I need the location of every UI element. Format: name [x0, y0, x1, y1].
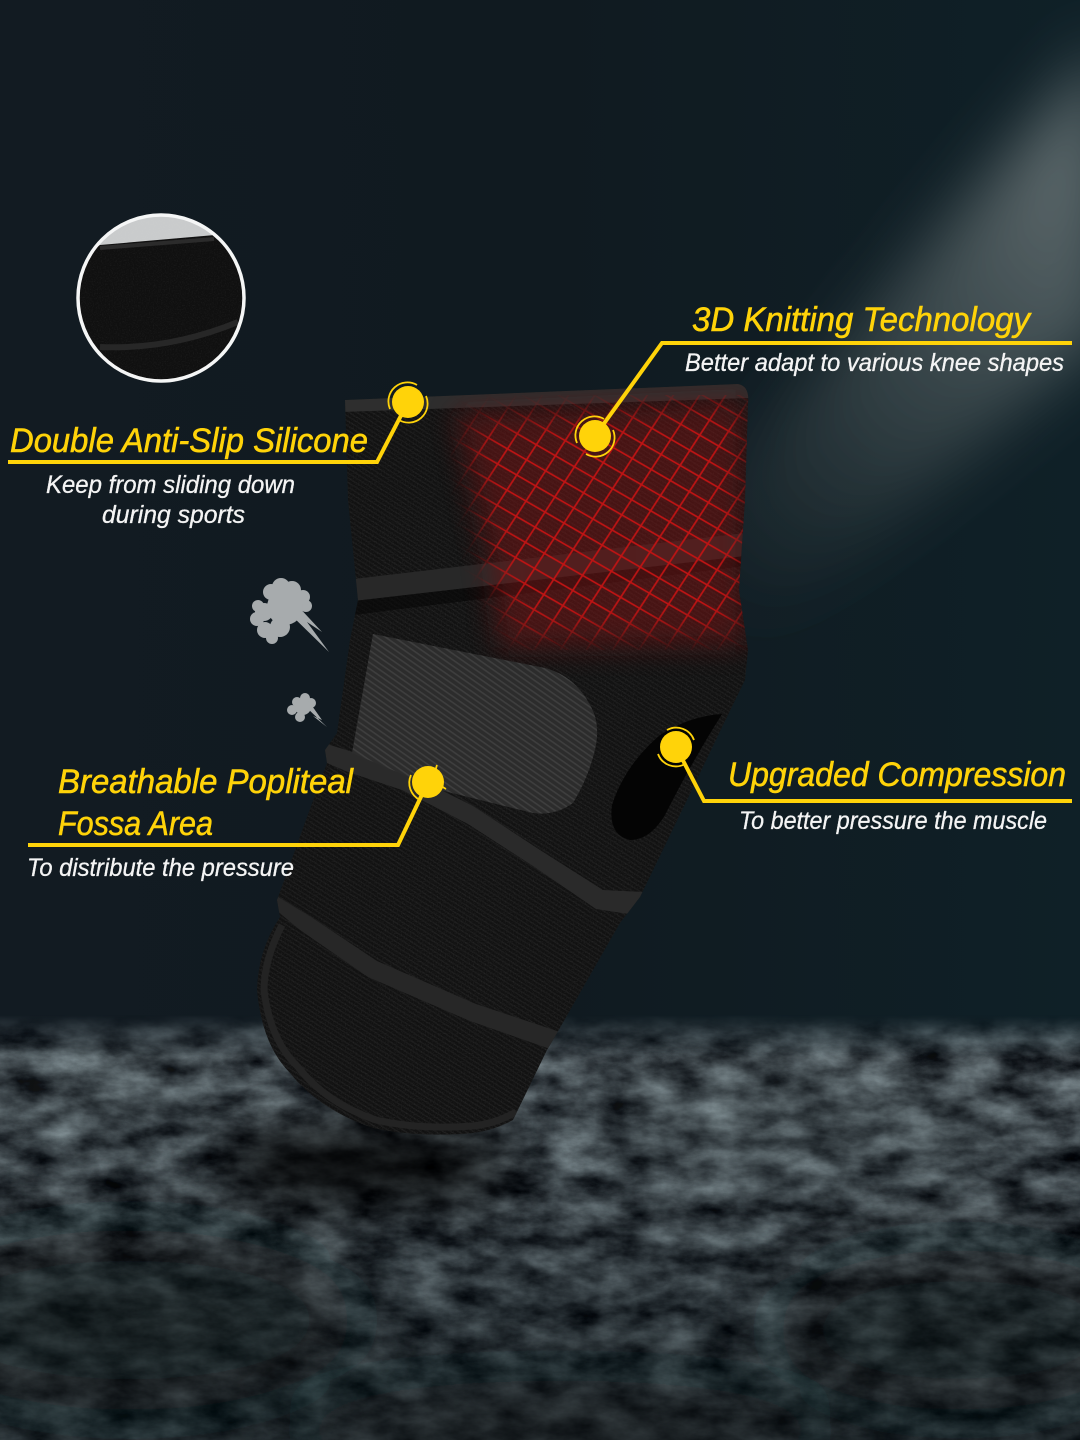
inset detail circle: [70, 215, 250, 385]
light beam: [650, 40, 1080, 650]
red heat glow: [455, 398, 745, 648]
description: To better pressure the muscle: [739, 807, 1047, 835]
textured floor: [0, 1015, 1080, 1440]
heading: 3D Knitting Technology: [692, 301, 1032, 339]
leader line: [8, 402, 408, 462]
strap shadow: [345, 556, 745, 616]
marker dot: [409, 765, 446, 800]
heading: Breathable Popliteal: [58, 763, 354, 801]
marker dot: [658, 728, 694, 766]
red diamond net: [450, 395, 750, 650]
callout: Breathable Popliteal Fossa Area: [27, 763, 446, 882]
leader line: [676, 747, 1072, 801]
description: Better adapt to various knee shapes: [685, 349, 1064, 377]
description: Keep from sliding down: [46, 471, 295, 499]
brace shadow on floor: [215, 1129, 515, 1201]
heading: Fossa Area: [58, 805, 213, 843]
icon: large smoke puff: [250, 578, 329, 652]
cuff edge binding: [264, 925, 516, 1127]
lower strap band: [270, 892, 560, 1049]
brace main body: [257, 384, 748, 1135]
knee brace: [257, 384, 748, 1135]
heading: Double Anti-Slip Silicone: [10, 422, 368, 460]
icon: small smoke puff: [287, 693, 327, 727]
heading: [58, 763, 354, 843]
description: [46, 471, 295, 529]
leader line: [595, 343, 1072, 436]
knee hole: [611, 714, 722, 840]
callout: 3D Knitting Technology: [575, 301, 1072, 457]
top binding: [345, 384, 748, 412]
marker dot: [388, 382, 428, 423]
velcro patch: [352, 634, 597, 814]
upper strap band: [345, 533, 745, 602]
marker dot: [575, 416, 615, 457]
description: To distribute the pressure: [27, 854, 294, 882]
callout: Double Anti-Slip Silicone: [8, 382, 428, 529]
leader line: [28, 782, 428, 845]
description: during sports: [102, 501, 245, 529]
middle strap band: [320, 742, 645, 915]
callout: Upgraded Compression: [658, 728, 1072, 835]
heading: Upgraded Compression: [728, 756, 1066, 794]
